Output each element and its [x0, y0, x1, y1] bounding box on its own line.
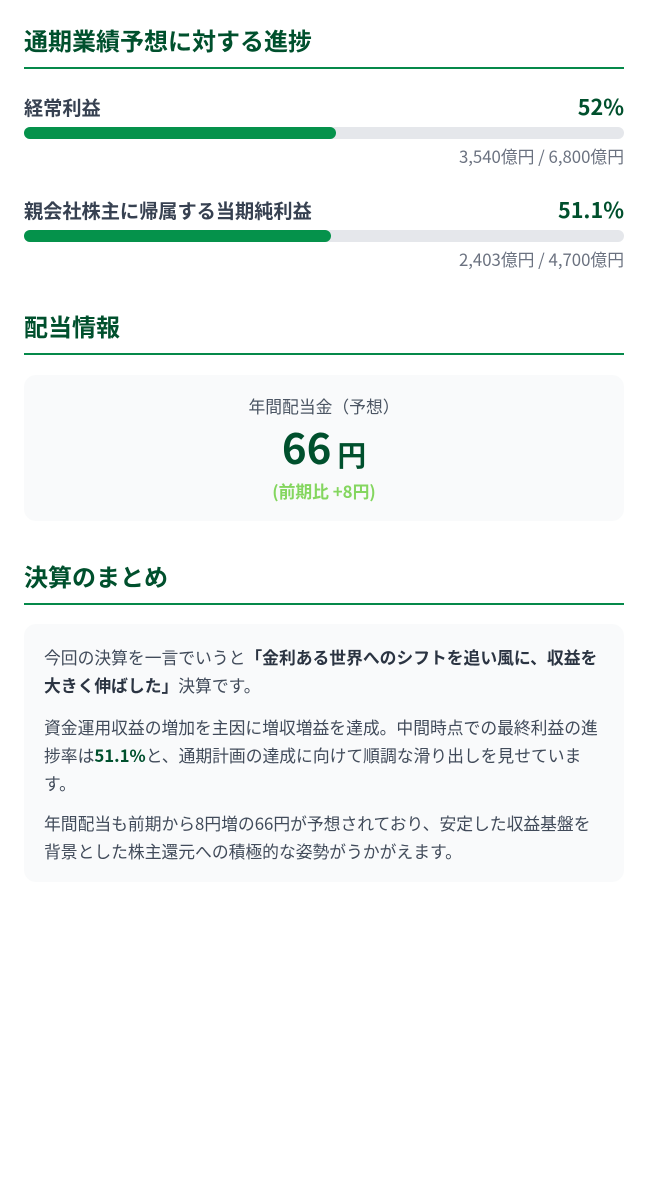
- value: ordinary profit percent: 52%: [578, 91, 624, 122]
- heading: forecast progress: 通期業績予想に対する進捗: [24, 22, 312, 57]
- heading rule: [24, 67, 624, 69]
- section: dividend: [24, 308, 624, 503]
- paragraph: summary two: す。: [44, 771, 76, 795]
- paragraph: summary three: [44, 811, 590, 863]
- heading: dividend: 配当情報: [24, 308, 120, 343]
- section: summary: [24, 558, 624, 863]
- panel: dividend card: [24, 375, 624, 521]
- label: ordinary profit: 経常利益: [24, 93, 101, 121]
- value: net income percent: 51.1%: [558, 194, 624, 225]
- paragraph: summary one: 今回の決算を一言でいうと「金利ある世界へのシフトを追い風に、収益を: [44, 645, 597, 669]
- label: net income: 親会社株主に帰属する当期純利益: [24, 196, 312, 224]
- paragraph: summary two: 資金運用収益の増加を主因に増収増益を達成。中間時点での最終利益の進: [44, 715, 598, 739]
- amount: ordinary profit: 3,540億円 / 6,800億円: [459, 144, 624, 168]
- heading rule: [24, 353, 624, 355]
- paragraph: summary one: [44, 645, 597, 697]
- paragraph: summary two: 捗率は51.1%と、通期計画の達成に向けて順調な滑り出しを見せていま: [44, 743, 581, 767]
- dividend change: (前期比 +8円): [272, 479, 376, 503]
- paragraph: summary one: 大きく伸ばした」決算です。: [44, 673, 260, 697]
- amount: net income: 2,403億円 / 4,700億円: [459, 247, 624, 271]
- paragraph: summary three: 背景とした株主還元への積極的な姿勢がうかがえます。: [44, 839, 462, 863]
- panel: summary card: [24, 624, 624, 882]
- paragraph: summary three: 年間配当も前期から8円増の66円が予想されており、安定した収益基盤を: [44, 811, 590, 835]
- dividend amount: 66円: [282, 416, 366, 477]
- paragraph: summary two: [44, 715, 598, 795]
- heading: summary: 決算のまとめ: [24, 558, 168, 593]
- progress bar: ordinary profit: [24, 127, 624, 139]
- section: forecast progress: [24, 22, 624, 271]
- heading rule: [24, 603, 624, 605]
- progress bar: net income: [24, 230, 624, 242]
- dividend caption: 年間配当金（予想）: [248, 394, 400, 418]
